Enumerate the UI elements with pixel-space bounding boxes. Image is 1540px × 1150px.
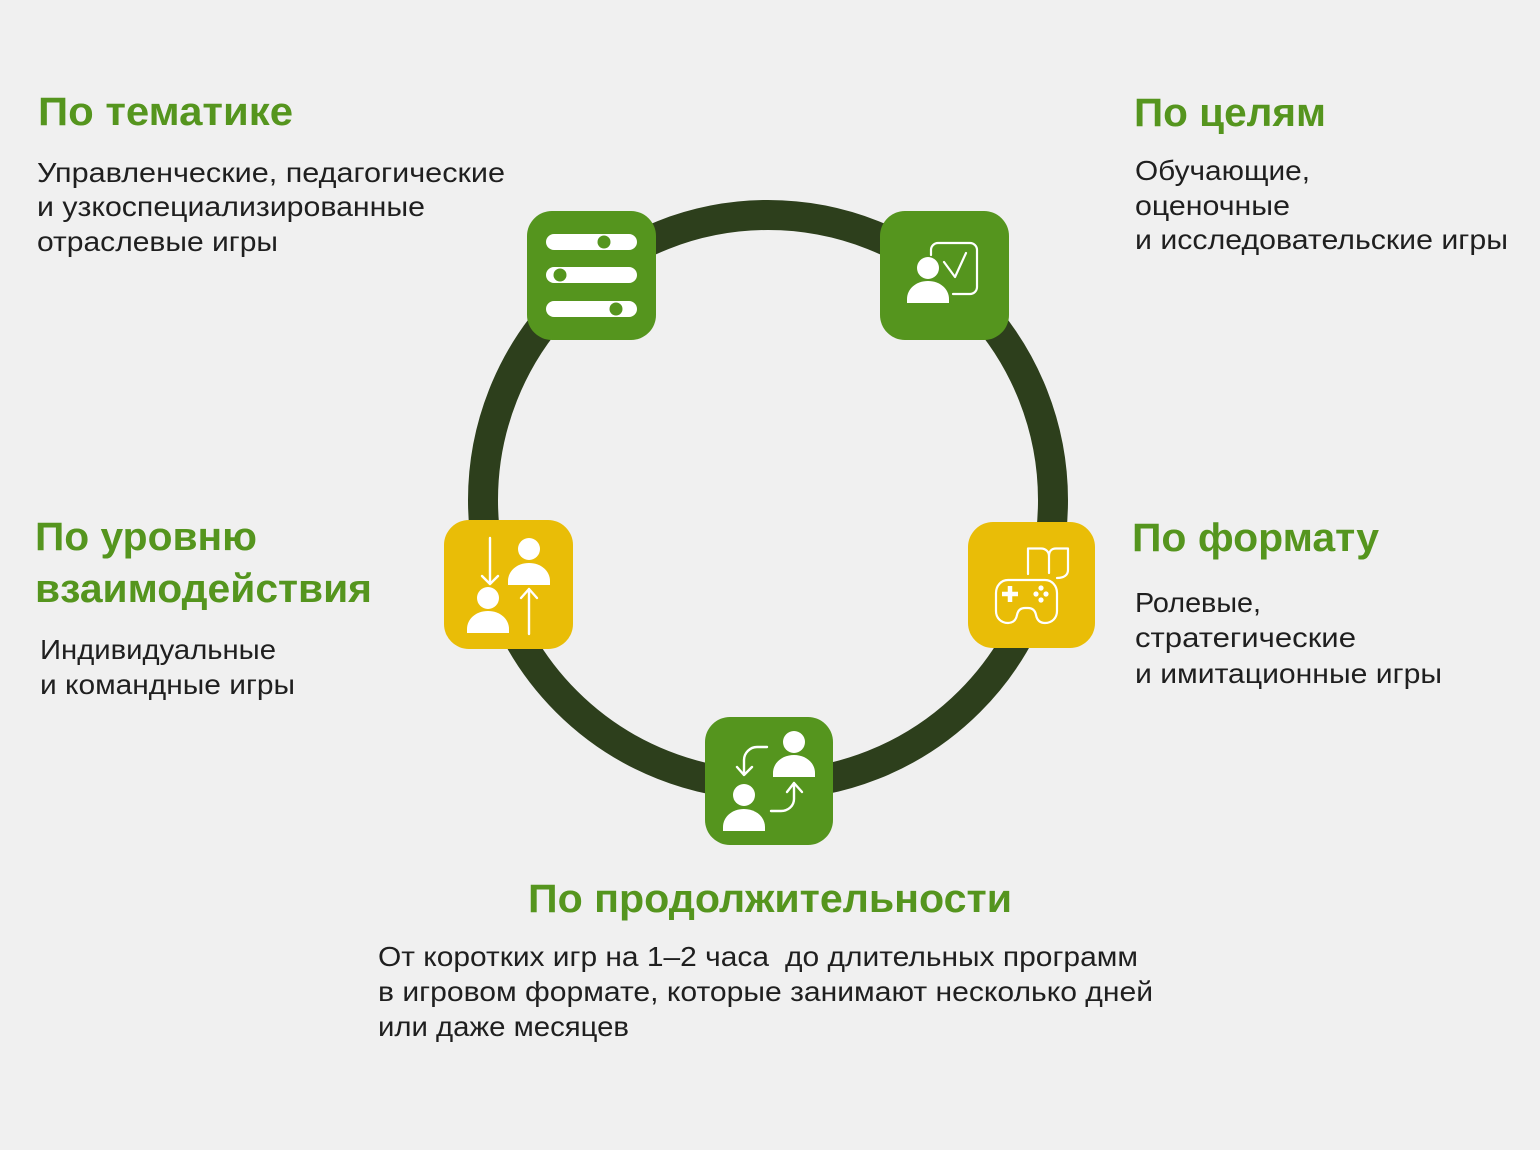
- heading: по продолжительности: По продолжительности: [528, 877, 1012, 921]
- text block: по тематике: и узкоспециализированные: [37, 191, 425, 222]
- text block: по формату: стратегические: [1135, 622, 1356, 653]
- text block: по целям: Обучающие,: [1135, 155, 1310, 186]
- text block: по формату: и имитационные игры: [1135, 658, 1442, 689]
- heading: по целям: По целям: [1134, 91, 1326, 135]
- text block: по уровню взаимодействия: Индивидуальные: [40, 634, 276, 665]
- panel: по целям: [1134, 91, 1508, 255]
- text block: по целям: и исследовательские игры: [1135, 224, 1508, 255]
- icon: person with checkmark board: [880, 211, 1009, 340]
- panel: по уровню взаимодействия: [35, 515, 372, 700]
- heading: по уровню взаимодействия: [35, 515, 372, 611]
- text block: по продолжительности: в игровом формате, которые занимают несколько дней: [378, 976, 1153, 1007]
- heading: по тематике: По тематике: [38, 90, 293, 134]
- text block: по продолжительности: или даже месяцев: [378, 1011, 629, 1042]
- text block: по тематике: Управленческие, педагогические: [37, 157, 505, 188]
- text block: по целям: [1135, 155, 1508, 255]
- ring connecting categories: [483, 215, 1053, 785]
- icon: gamepad and book: [968, 522, 1095, 648]
- text block: по тематике: [37, 157, 505, 257]
- text block: по продолжительности: От коротких игр на 1–2 часа: [378, 941, 769, 972]
- text block: по формату: Ролевые,: [1135, 587, 1261, 618]
- icon: sliders: [527, 211, 656, 340]
- text block: по продолжительности: до длительных программ: [785, 941, 1138, 972]
- icon: people exchange arrows: [705, 717, 833, 845]
- panel: по продолжительности: [378, 877, 1153, 1042]
- text block: по целям: оценочные: [1135, 190, 1290, 221]
- heading: по уровню взаимодействия: По уровню: [35, 515, 257, 559]
- text block: по формату: [1135, 587, 1442, 689]
- panel: по формату: [1132, 516, 1442, 689]
- text block: по тематике: отраслевые игры: [37, 226, 278, 257]
- text block: по уровню взаимодействия: [40, 634, 295, 700]
- heading: по формату: По формату: [1132, 516, 1380, 560]
- panel: по тематике: [37, 90, 505, 257]
- icon: individual and team arrows: [444, 520, 573, 649]
- heading: по уровню взаимодействия: взаимодействия: [35, 567, 372, 611]
- text block: по уровню взаимодействия: и командные игры: [40, 669, 295, 700]
- text block: по продолжительности: [378, 941, 1153, 1042]
